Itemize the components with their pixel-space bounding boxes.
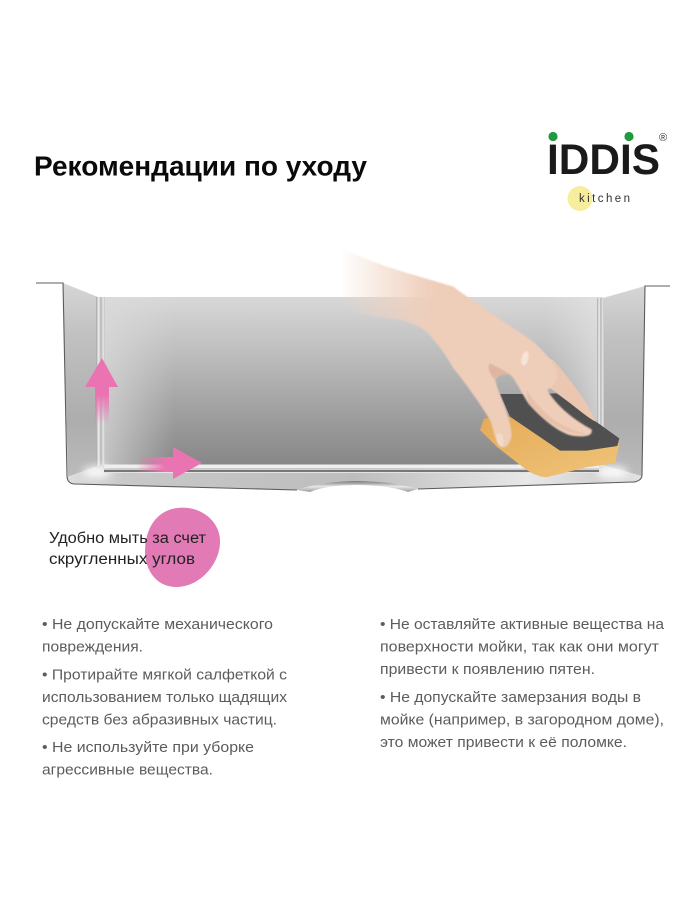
sink left side wall [63,283,98,480]
hand palm and fingers [337,247,592,447]
sink back wall [100,297,603,467]
hand ring finger [537,353,596,422]
sponge dark scrub side [500,393,619,451]
logo kitchen text: kitchen [579,193,630,205]
sink right corner seam [597,298,604,466]
sink illustration [36,247,670,492]
text block: care tips, left column: • Протирайте мягкой салфеткой с [42,668,287,684]
text block: care tips, right column: это может привести к её поломке. [380,735,627,751]
logo green dot right [624,132,634,141]
callout text: Удобно мыть за счет [49,530,206,547]
text block: care tips, left column [42,617,288,778]
title: Рекомендации по уходу [34,150,368,182]
text block: care tips, left column: повреждения. [42,640,143,656]
callout text [49,530,206,568]
sink right corner highlight [596,466,628,478]
logo green dot left [548,132,558,141]
arrow: rightward [136,447,202,479]
text block: care tips, left column: • Не допускайте механического [42,617,273,633]
sink floor [67,465,642,490]
logo yellow blob [568,186,592,211]
logo wordmark: IDDIS [547,136,660,184]
text block: care tips, left column: агрессивные вещества. [42,762,213,778]
text block: care tips, right column: привести к появлению пятен. [380,662,595,678]
text block: care tips, right column: • Не оставляйте активные вещества на [380,617,665,633]
sponge [480,393,619,477]
hand index finger shading [527,390,587,434]
sponge yellow body [480,417,619,477]
logo: IDDIS kitchen [547,132,667,211]
sink outline [36,283,670,490]
text block: care tips, left column: средств без абразивных частиц. [42,712,277,728]
hand shadow between thumb and index [489,363,511,380]
callout text: скругленных углов [49,551,195,568]
sink left corner highlight [83,466,111,478]
sink overflow cutout lip [297,481,418,492]
hand thumb nail [497,433,504,446]
text block: care tips, left column: использованием только щадящих [42,690,288,706]
text block: care tips, left column: • Не используйте при уборке [42,740,254,756]
callout: rounded corners [49,508,220,587]
logo registered mark: ® [659,132,667,144]
sink drain rail [104,464,599,473]
text block: care tips, right column [380,617,665,751]
hand [337,247,596,447]
text block: care tips, right column: поверхности мойки, так как они могут [380,640,659,656]
text block: care tips, right column: мойке (например, в загородном доме), [380,712,664,728]
sink right side wall [603,286,645,478]
sink left corner seam [96,297,105,467]
text block: care tips, right column: • Не допускайте замерзания воды в [380,690,641,706]
hand knuckle highlight [520,350,530,366]
arrow: upward [85,358,118,424]
callout pink blob [145,508,220,587]
